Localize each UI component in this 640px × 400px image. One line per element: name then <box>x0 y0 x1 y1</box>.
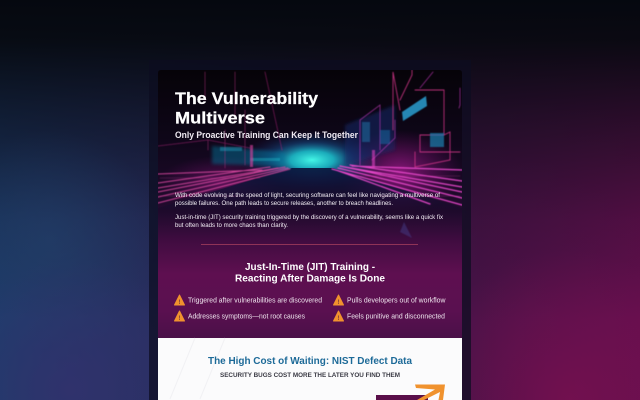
bullet: triggered after discovery <box>174 295 322 306</box>
title <box>175 92 318 124</box>
panel: NIST defect data <box>158 338 462 400</box>
title: Multiverse <box>175 108 265 128</box>
bullet: pulls developers out: Pulls developers out of workflow <box>347 298 446 304</box>
panel: hero card <box>158 70 462 338</box>
dark outer frame <box>149 60 471 400</box>
title: The Vulnerability <box>175 89 319 108</box>
intro paragraphs: With code evolving at the speed of light, securing software can feel like navigating a multiverse of <box>175 192 440 199</box>
bullet: addresses symptoms <box>174 311 305 322</box>
intro paragraphs: possible failures. One path leads to secure releases, another to breach headlines. <box>175 200 393 207</box>
intro paragraphs: Just-in-time (JIT) security training triggered by the discovery of a vulnerability, seems like a quick fix <box>175 214 444 221</box>
bullet: feels punitive <box>334 311 445 322</box>
bullet: feels punitive: ! <box>338 316 340 322</box>
JIT heading: Reacting After Damage Is Done <box>235 272 385 284</box>
chart bar <box>376 395 428 400</box>
NIST subheading: SECURITY BUGS COST MORE THE LATER YOU FIND THEM <box>220 373 400 379</box>
bullet: triggered after discovery: Triggered after vulnerabilities are discovered <box>188 298 322 304</box>
warning list <box>174 295 446 322</box>
NIST heading: The High Cost of Waiting: NIST Defect Data <box>208 356 412 367</box>
bullet: feels punitive: Feels punitive and disconnected <box>347 314 445 320</box>
subtitle: Only Proactive Training Can Keep It Together <box>175 130 358 140</box>
bullet: triggered after discovery: ! <box>178 300 180 306</box>
bullet: addresses symptoms: Addresses symptoms—not root causes <box>188 314 305 320</box>
bullet: addresses symptoms: ! <box>178 316 180 322</box>
bullet: pulls developers out: ! <box>338 300 340 306</box>
JIT heading <box>236 262 385 284</box>
icon: rising arrow <box>415 384 445 400</box>
hero cyber corridor illustration <box>158 70 462 240</box>
bullet: pulls developers out <box>334 295 446 306</box>
intro paragraphs: but often leads to more chaos than clarity. <box>175 222 288 229</box>
intro paragraphs <box>175 192 444 229</box>
divider <box>201 244 418 245</box>
JIT heading: Just-In-Time (JIT) Training - <box>245 261 375 273</box>
